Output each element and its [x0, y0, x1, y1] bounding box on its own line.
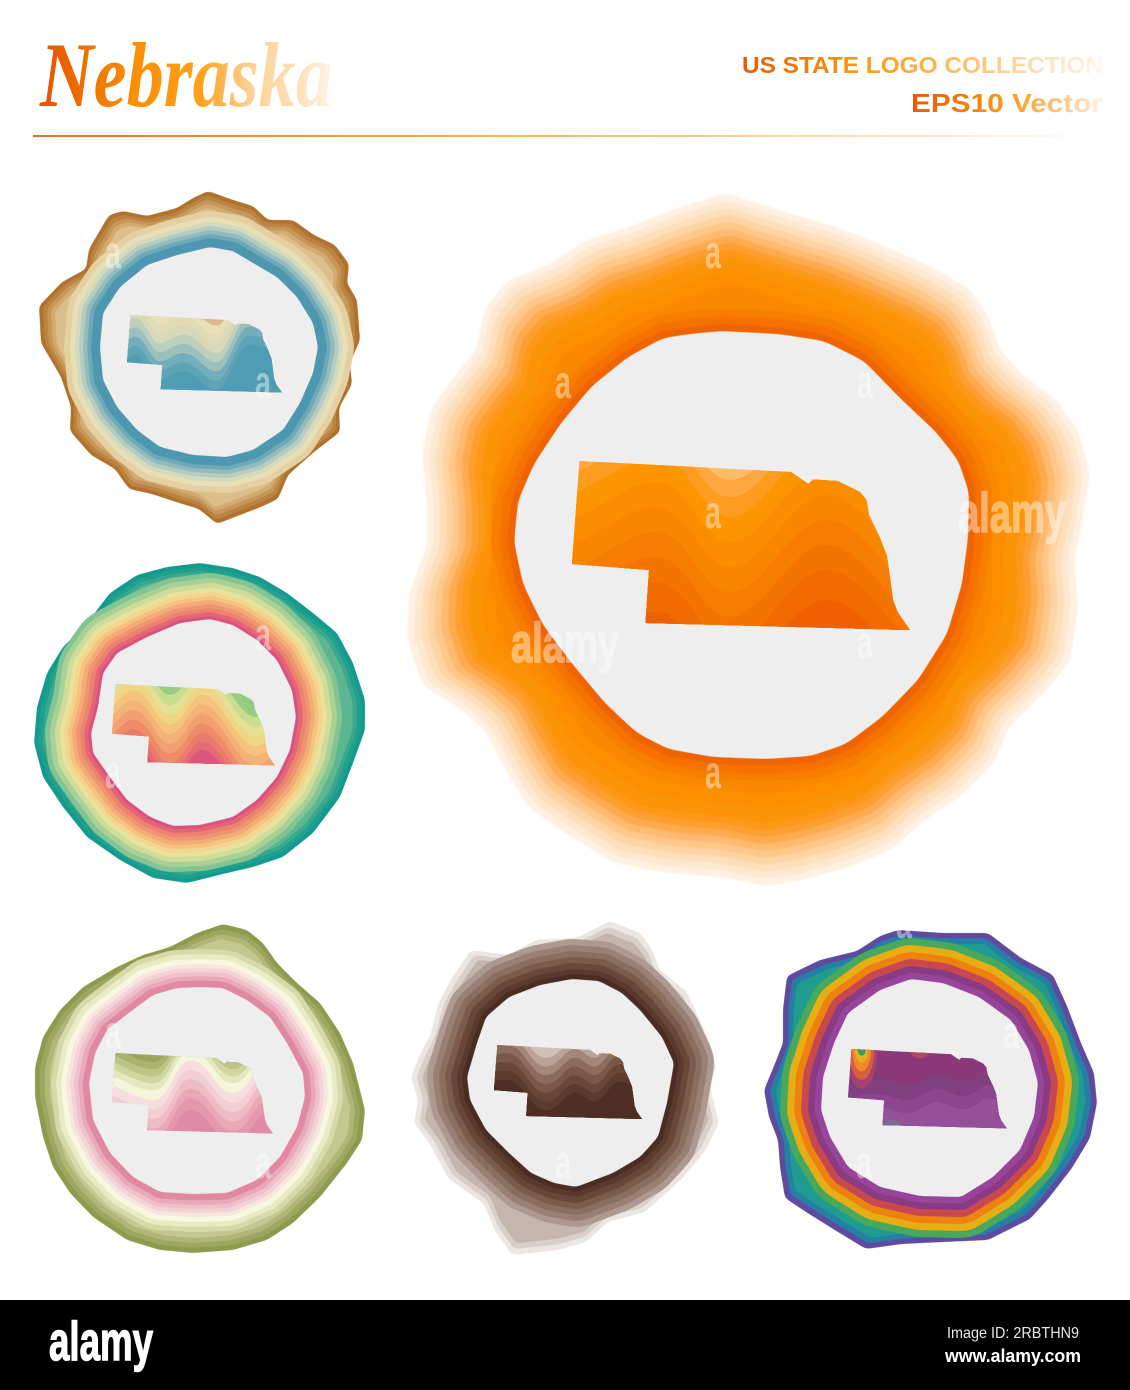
state map: brown Nebraska: [494, 1045, 642, 1119]
badge: dark brown logo: [411, 921, 719, 1255]
watermark: alamy stamps: [105, 226, 1066, 1188]
badge: teal and coral logo: [34, 563, 365, 883]
footer bar: [0, 1300, 1130, 1390]
watermark: alamy stamps: alamy: [958, 481, 1066, 544]
watermark: alamy stamps: a: [856, 1136, 872, 1188]
watermark: alamy stamps: a: [105, 746, 121, 798]
watermark: alamy stamps: a: [705, 746, 721, 798]
badge: rainbow logo: [764, 930, 1097, 1249]
state map: olive and pink Nebraska: [112, 1053, 273, 1134]
subtitle: format: EPS10 Vector: [911, 88, 1103, 118]
badge: brown and teal logo: [39, 191, 360, 524]
title: Nebraska: Nebraska: [39, 24, 333, 126]
watermark: alamy stamps: a: [255, 608, 271, 660]
watermark: alamy stamps: a: [705, 226, 721, 278]
badge: large orange logo: [407, 193, 1090, 886]
badge: olive and pink logo: [35, 924, 365, 1253]
state map: orange Nebraska: [572, 461, 910, 630]
watermark: alamy stamps: a: [857, 616, 873, 668]
watermark: alamy stamps: a: [896, 896, 912, 948]
subtitle: collection name: US STATE LOGO COLLECTION: [742, 52, 1103, 78]
watermark: alamy stamps: a: [105, 1006, 121, 1058]
watermark: alamy stamps: a: [555, 356, 571, 408]
website: www.alamy.com: [944, 1346, 1081, 1366]
watermark: alamy stamps: a: [555, 1136, 571, 1188]
watermark: alamy stamps: a: [857, 356, 873, 408]
state map: teal Nebraska: [127, 315, 282, 392]
watermark: alamy stamps: a: [705, 486, 721, 538]
watermark: alamy stamps: a: [1003, 1006, 1019, 1058]
watermark: alamy stamps: alamy: [511, 611, 619, 674]
state map: purple Nebraska: [848, 1049, 1007, 1128]
watermark: alamy stamps: a: [105, 226, 121, 278]
watermark: alamy stamps: a: [255, 356, 271, 408]
footer logo: alamy: [49, 1310, 153, 1372]
state map: spectral Nebraska: [112, 684, 275, 766]
watermark: alamy stamps: a: [255, 1136, 271, 1188]
image id: Image ID: 2RBTHN9: [947, 1325, 1079, 1342]
